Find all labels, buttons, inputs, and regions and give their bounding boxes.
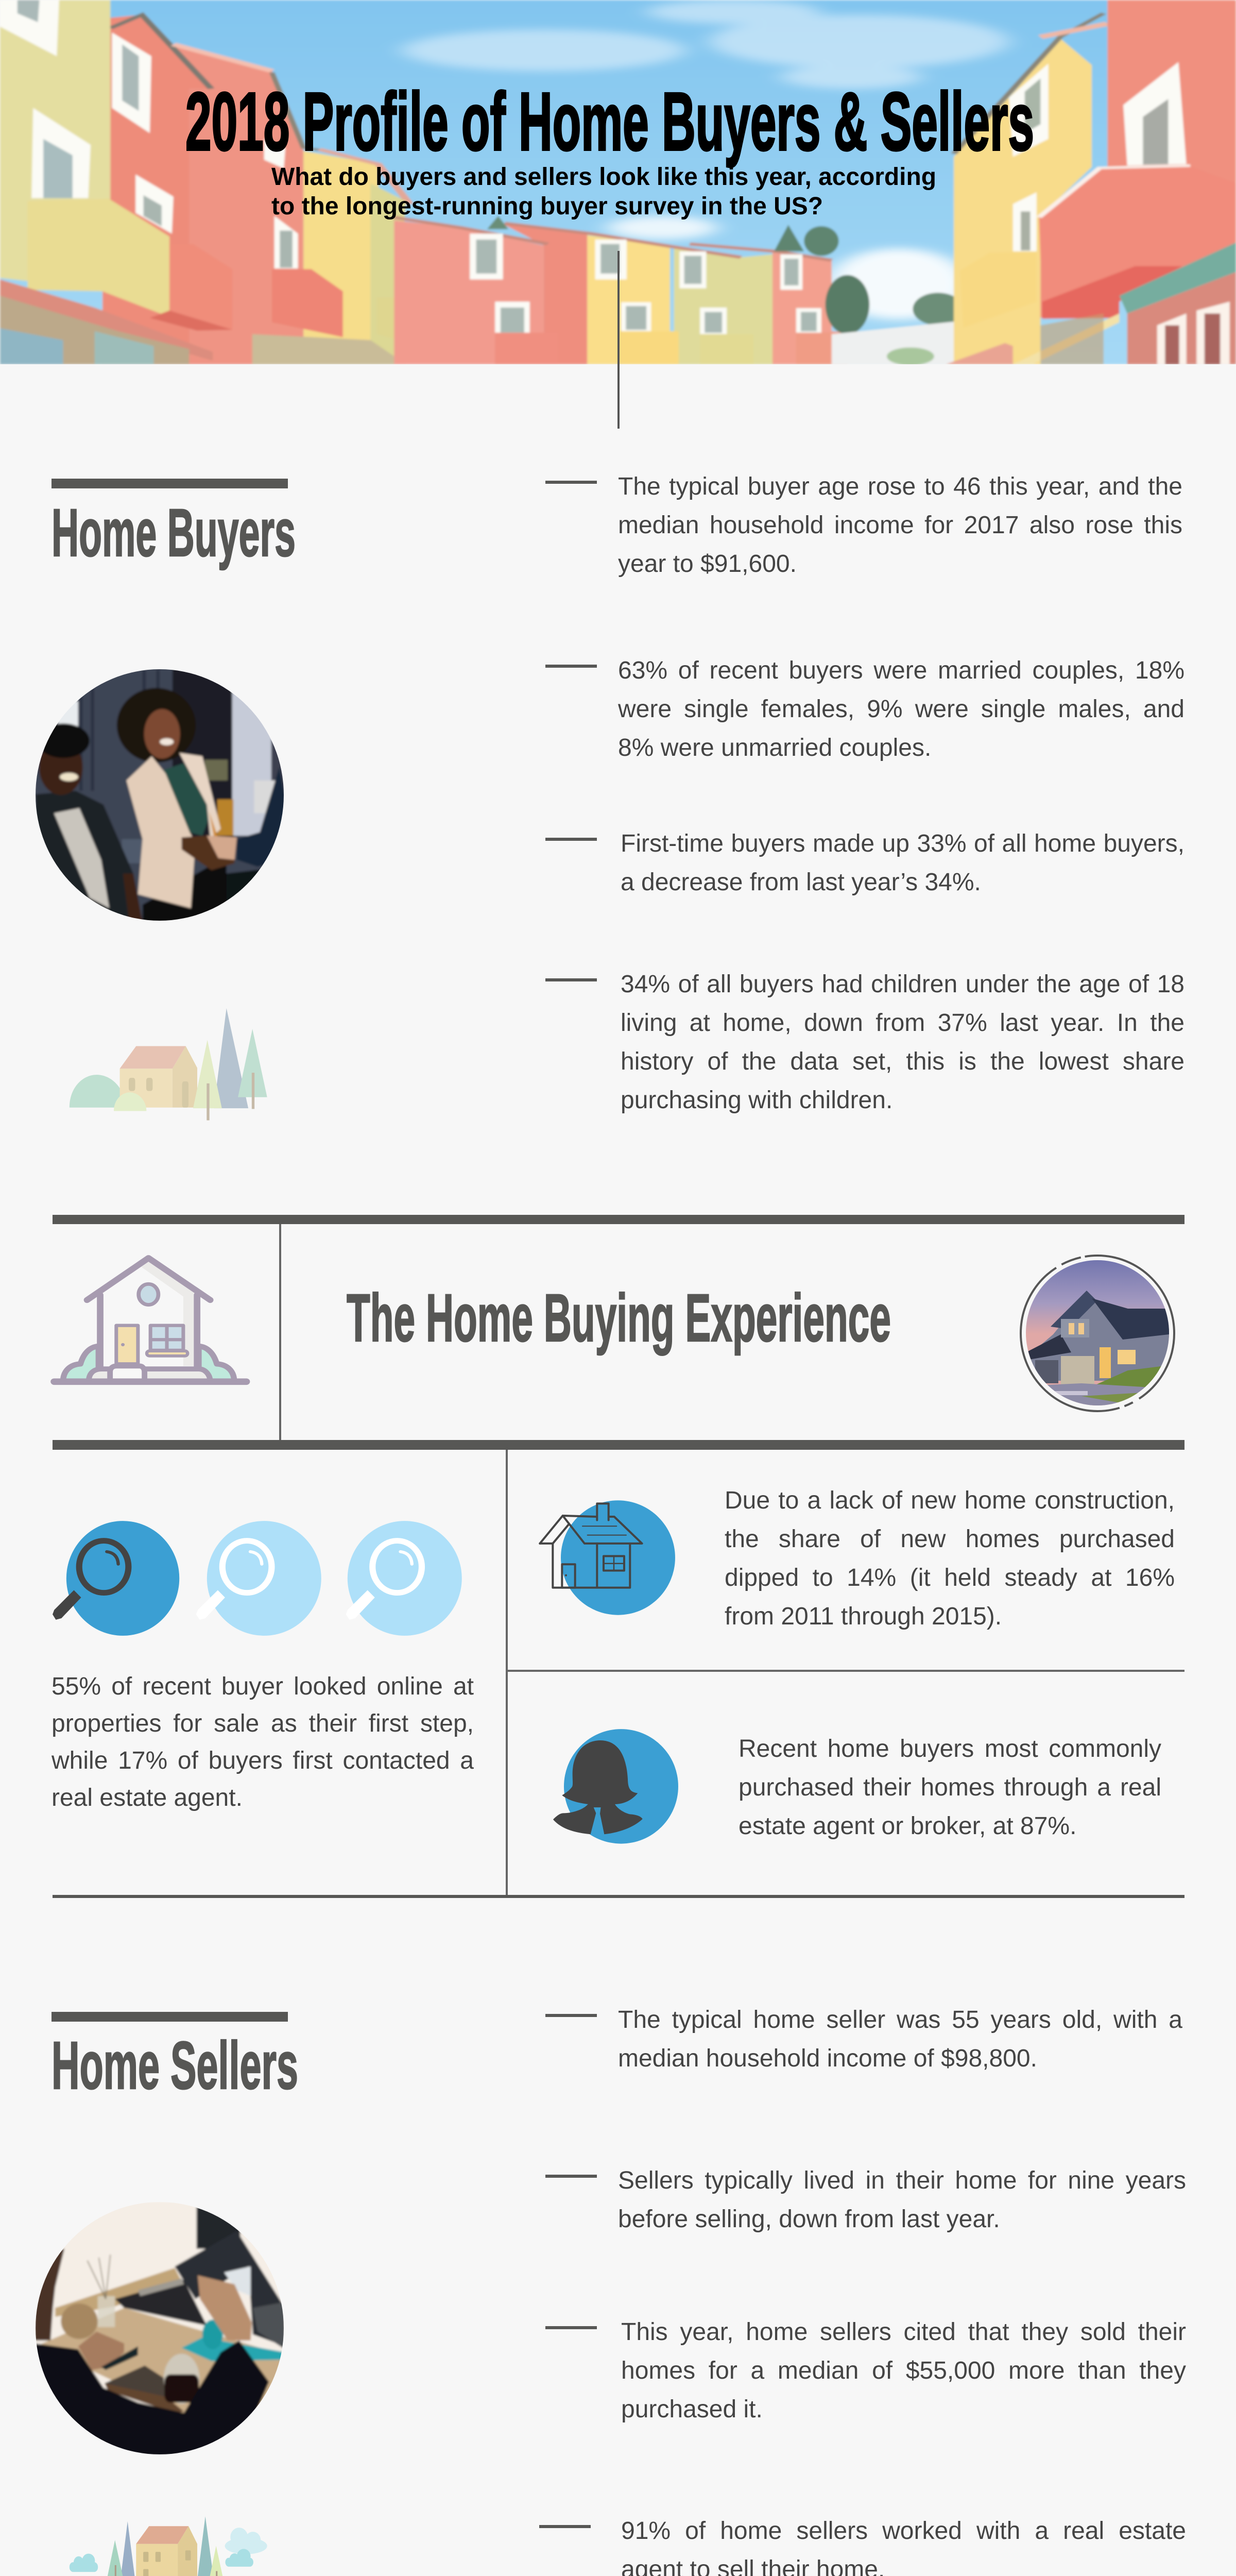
dash: agent use	[539, 2525, 591, 2528]
divider: vertical	[506, 1450, 508, 1895]
text: new construction: Due to a lack of new home construction,	[725, 1487, 1175, 1514]
text: household types: 8% were unmarried couples.	[618, 734, 931, 761]
text: new construction: from 2011 through 2015).	[725, 1603, 1002, 1630]
text: typical seller	[618, 2001, 1182, 2078]
dash: household types	[545, 665, 597, 668]
illustration: pastel house with trees	[70, 1008, 267, 1121]
text: agent use	[621, 2512, 1186, 2576]
dash: typical seller	[545, 2014, 597, 2017]
text: median gain: purchased it.	[621, 2396, 763, 2423]
dash: buyer age	[545, 481, 597, 484]
text: first-time buyers	[621, 824, 1184, 902]
text: tenure: before selling, down from last year.	[618, 2206, 1000, 2233]
text: buyer age: The typical buyer age rose to 46 this year, and the	[618, 473, 1182, 500]
icon: house on blue circle	[540, 1500, 675, 1615]
text: agent purchases: purchased their homes through a real	[739, 1774, 1161, 1801]
divider: icon cell	[279, 1224, 281, 1440]
illustration: house on green hills	[70, 2516, 267, 2576]
text: first-time buyers: First-time buyers made up 33% of all home buyers,	[621, 830, 1184, 857]
text: agent purchases	[739, 1730, 1161, 1845]
header photo: colourful townhouse street	[0, 0, 1236, 365]
text: children: purchasing with children.	[621, 1087, 892, 1114]
panel: home sellers	[35, 2001, 1186, 2576]
text: online search: properties for sale as their first step,	[52, 1710, 474, 1737]
subtitle	[271, 163, 936, 220]
text: children: living at home, down from 37% last year. In the	[621, 1009, 1184, 1037]
text: online search: 55% of recent buyer looked online at	[52, 1673, 474, 1700]
text: new construction: the share of new homes purchased	[725, 1526, 1175, 1553]
subtitle: What do buyers and sellers look like this year, according	[271, 163, 936, 191]
text: household types: were single females, 9% were single males, and	[618, 696, 1184, 723]
text: household types	[618, 651, 1184, 767]
divider: horizontal	[507, 1670, 1184, 1672]
dash: tenure	[545, 2175, 597, 2178]
text: children: history of the data set, this is the lowest share	[621, 1048, 1184, 1075]
text: online search: real estate agent.	[52, 1784, 243, 1811]
rule: bottom	[53, 1440, 1184, 1450]
text: household types: 63% of recent buyers were married couples, 18%	[618, 657, 1184, 684]
rule: top	[53, 1215, 1184, 1224]
text: agent purchases: estate agent or broker, at 87%.	[739, 1812, 1076, 1840]
heading: home sellers: Home Sellers	[52, 2027, 298, 2103]
panel: the home buying experience header	[53, 1215, 1184, 1450]
dash: median gain	[545, 2326, 597, 2329]
panel: home buyers	[35, 467, 1184, 1121]
heading: home buyers: Home Buyers	[52, 495, 296, 570]
text: median gain	[621, 2313, 1186, 2429]
rule: bottom	[53, 1895, 1184, 1898]
panel: home buying experience details	[52, 1450, 1184, 1898]
icon: lilac house	[54, 1258, 246, 1382]
text: new construction	[725, 1481, 1175, 1636]
text: buyer age	[618, 467, 1182, 583]
text: buyer age: year to $91,600.	[618, 550, 797, 578]
icon: three magnifying glasses	[53, 1521, 462, 1636]
text: agent purchases: Recent home buyers most commonly	[739, 1735, 1161, 1762]
text: first-time buyers: a decrease from last year’s 34%.	[621, 869, 981, 896]
dash: first-time buyers	[545, 838, 597, 841]
text: typical seller: The typical home seller was 55 years old, with a	[618, 2006, 1182, 2033]
photo: house at dusk with broken ring	[1020, 1256, 1174, 1412]
dash: children	[545, 978, 597, 981]
heading bar: home sellers	[52, 2012, 288, 2022]
text: typical seller: median household income of $98,800.	[618, 2045, 1037, 2072]
text: new construction: dipped to 14% (it held steady at 16%	[725, 1564, 1175, 1591]
text: children	[621, 965, 1184, 1120]
text: online search	[52, 1668, 474, 1817]
subtitle: to the longest-running buyer survey in the US?	[271, 193, 823, 220]
text: median gain: This year, home sellers cited that they sold their	[621, 2318, 1186, 2346]
heading bar: home buyers	[52, 479, 288, 488]
text: median gain: homes for a median of $55,000 more than they	[621, 2357, 1186, 2384]
text: agent use: 91% of home sellers worked with a real estate	[621, 2517, 1186, 2545]
connector line from header	[617, 251, 620, 429]
text: tenure: Sellers typically lived in their home for nine years	[618, 2167, 1186, 2194]
photo: handshake with two women	[35, 667, 287, 925]
text: children: 34% of all buyers had children under the age of 18	[621, 971, 1184, 998]
icon: agent silhouette on blue circle	[553, 1729, 678, 1844]
photo: handshake over cafe table	[35, 2201, 287, 2456]
text: online search: while 17% of buyers first contacted a	[52, 1747, 474, 1774]
text: tenure	[618, 2161, 1186, 2239]
text: buyer age: median household income for 2017 also rose this	[618, 512, 1182, 539]
